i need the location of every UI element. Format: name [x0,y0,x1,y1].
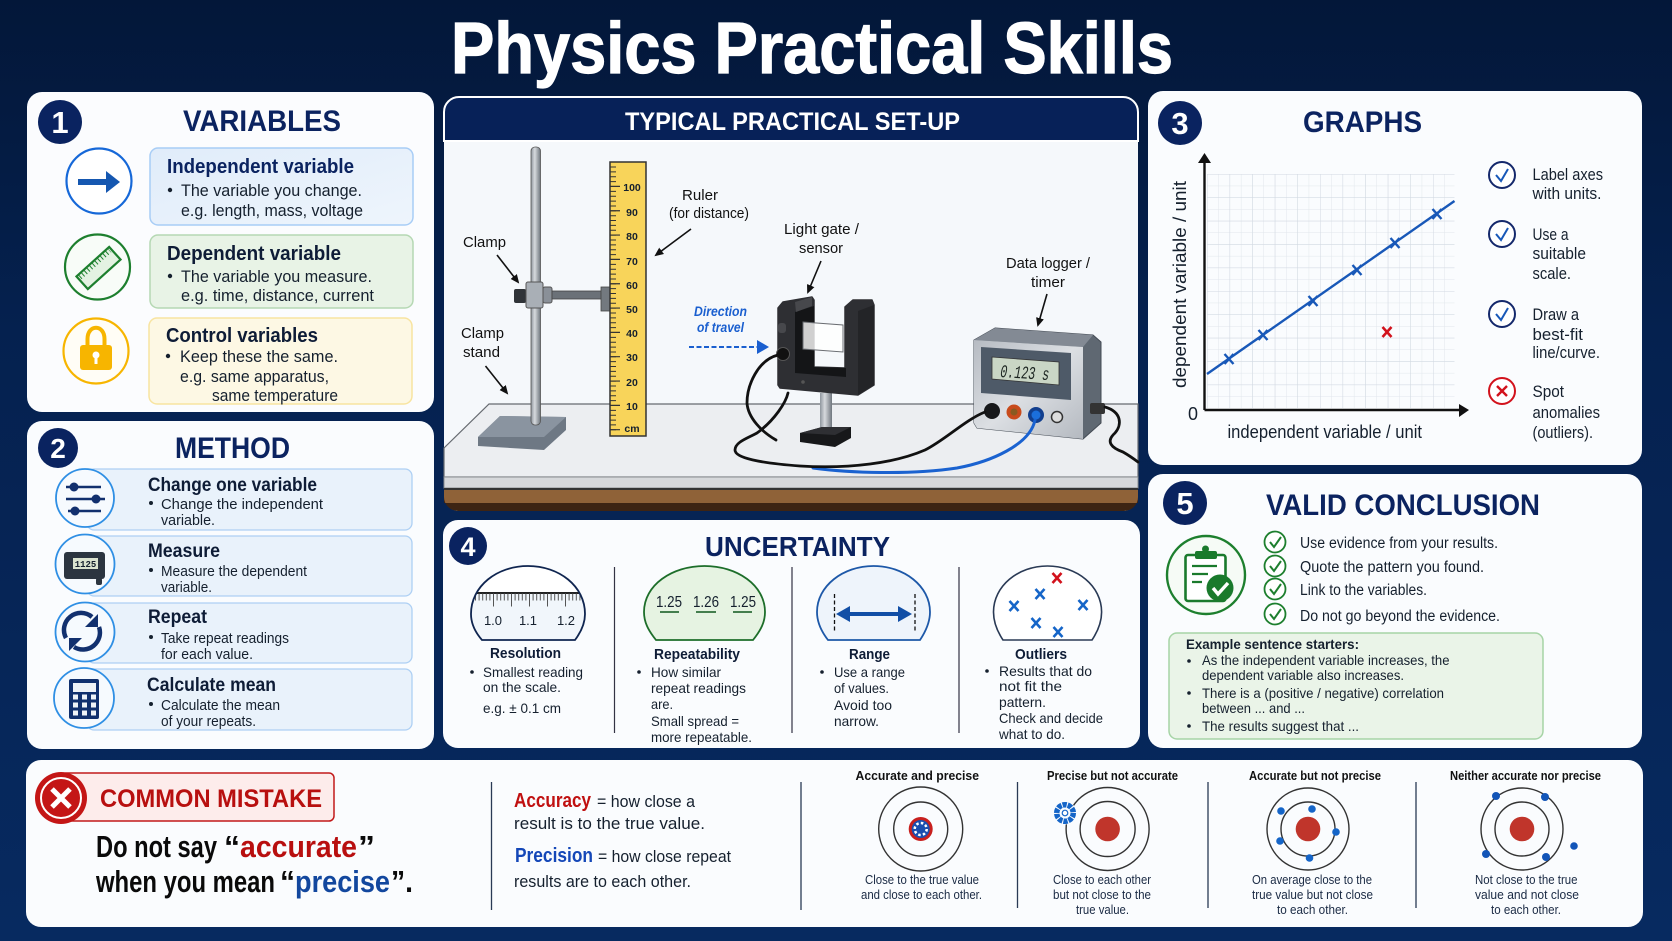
icon: resolution scale dome [470,566,586,640]
independent variable box: The variable you change. [181,181,362,200]
badge 1 [38,100,82,144]
panel: valid conclusion [1148,474,1642,748]
icon: arrow [66,148,132,214]
icon: ruler [65,234,130,300]
target: precise but not accurate: but not close to the [1053,888,1151,902]
title: Physics Practical Skills [451,9,1173,89]
target: accurate but not precise [1249,768,1381,917]
label: clamp stand: stand [463,344,500,361]
text: repeatability: more repeatable. [651,729,752,745]
definitions: Precision [515,845,593,867]
checklist: best-fit line: Draw a [1532,306,1580,324]
text: range: Use a range [834,664,905,680]
checklist item: evidence [1264,532,1498,552]
text: repeatability: Repeatability [654,646,741,663]
icon: repeatability dome: 1.26 [693,594,719,611]
target: accurate but not precise: On average close to the [1252,873,1372,887]
heading: uncertainty: UNCERTAINTY [705,531,890,562]
warning sentence: “ [224,829,240,864]
badge 4: 4 [460,532,476,562]
checklist item: pattern: Quote the pattern you found. [1300,559,1484,576]
badge 3: 3 [1171,106,1189,141]
control variables box [149,318,412,405]
badge 2 [38,428,78,468]
clamp stand [478,147,566,450]
label: ruler: (for distance) [669,205,749,222]
label: data logger [1006,255,1091,325]
direction of travel arrow: Direction [694,303,747,319]
checklist item: evidence: Use evidence from your results. [1300,535,1498,552]
text: outliers: Results that do [999,663,1092,679]
direction of travel arrow [689,303,769,354]
line graph [1170,153,1469,442]
text: range [820,646,905,729]
checklist: label axes: Label axes [1532,166,1603,184]
warning sentence: ” [358,829,375,864]
target: accurate but not precise: Accurate but not precise [1249,768,1381,783]
checklist: label axes: with units. [1532,185,1602,203]
target: accurate but not precise: true value but not close [1252,888,1373,902]
example sentence starters box: between ... and ... [1202,700,1305,716]
step: change one variable [87,469,412,530]
text: resolution: e.g. ± 0.1 cm [483,700,561,716]
warning sentence [95,829,413,899]
definitions: result is to the true value. [514,814,705,833]
label: light gate: sensor [799,240,843,257]
clamp [514,282,610,311]
line graph: independent variable / unit [1228,422,1422,442]
text: range: Range [849,646,890,663]
checklist: best-fit line: line/curve. [1532,344,1600,362]
heading: graphs: GRAPHS [1303,106,1422,139]
checklist item: variables [1264,578,1427,600]
text: outliers [985,646,1103,742]
target: neither accurate nor precise: Not close to the true [1475,873,1578,887]
step: calculate mean [87,669,412,730]
target: precise but not accurate: true value. [1076,903,1129,917]
panel: common mistake [26,760,1643,927]
text: outliers: what to do. [998,726,1065,742]
label: light gate: Light gate / [784,221,860,238]
icon: calculator [54,668,114,728]
definitions: = how close repeat [598,847,731,866]
checklist: best-fit line [1489,301,1600,362]
ruler: 10 [626,401,638,413]
common mistake banner: COMMON MISTAKE [100,785,322,813]
icon: lock [64,318,128,384]
control variables box: Keep these the same. [180,347,338,366]
ruler: 50 [626,304,638,316]
label: clamp [463,234,518,282]
text: repeatability: are. [651,696,673,712]
text: outliers: not fit the [999,678,1062,694]
text: resolution: on the scale. [483,679,561,695]
target: neither accurate nor precise: Neither accurate nor precise [1450,768,1601,783]
text: range: Avoid too [834,697,892,713]
warning sentence: accurate [240,829,357,864]
heading: variables: VARIABLES [183,105,341,138]
target: accurate and precise: Close to the true value [865,873,979,887]
text: resolution: Resolution [490,645,561,662]
text: outliers: Check and decide [999,710,1103,726]
panel: uncertainty [443,520,1140,748]
label: clamp: Clamp [463,234,506,251]
icon: resolution scale dome: 1.1 [519,613,537,628]
text: repeatability [637,646,752,745]
text: range: narrow. [834,713,879,729]
target: neither accurate nor precise [1450,768,1601,917]
line graph: 0 [1188,404,1198,424]
badge 4 [449,527,487,565]
heading: valid conclusion: VALID CONCLUSION [1266,489,1540,522]
icon: meter: 1125 [75,560,96,570]
checklist: anomalies: (outliers). [1532,424,1593,442]
text: outliers: Outliers [1015,646,1067,663]
header bar [444,97,1138,141]
target: precise but not accurate: Precise but not accurate [1047,768,1178,783]
label: clamp stand [461,325,507,393]
definitions: results are to each other. [514,872,691,891]
checklist item: pattern [1264,556,1484,576]
line graph: dependent variable / unit [1170,181,1190,388]
badge 2: 2 [50,433,66,464]
icon: sliders [56,469,114,527]
step: measure: Measure the dependent [161,563,308,580]
icon: repeatability dome: 1.25 [656,594,682,611]
icon: clipboard [1167,536,1245,614]
checklist: best-fit line: best-fit [1532,326,1583,344]
icon: range dome [817,566,930,640]
definitions [514,790,731,891]
independent variable box [150,148,413,225]
icon: outliers dome [994,566,1102,640]
example sentence starters box: The results suggest that ... [1202,718,1359,734]
example sentence starters box [1169,633,1543,739]
checklist: suitable scale: Use a [1532,226,1569,244]
icon: repeatability dome: 1.25 [730,594,756,611]
step: measure: variable. [161,579,212,596]
checklist: suitable scale: suitable [1532,245,1586,263]
step: repeat [87,603,412,663]
ruler: cm [624,423,640,435]
step: measure: Measure [148,540,220,562]
ruler: 30 [626,352,638,364]
checklist: suitable scale [1489,221,1586,283]
text: resolution [470,645,583,716]
ruler: 90 [626,207,638,219]
step: calculate mean: Calculate mean [147,674,276,696]
step: repeat: for each value. [161,646,253,663]
icon: repeatability dome [644,566,765,640]
icon: resolution scale dome: 1.0 [484,613,502,628]
checklist: suitable scale: scale. [1532,265,1571,283]
independent variable box: Independent variable [167,156,354,178]
label: ruler [656,187,749,255]
ruler [610,162,646,436]
label: data logger: timer [1031,274,1065,291]
target: precise but not accurate [1047,768,1178,917]
definitions: Accuracy [514,790,592,812]
ruler: 60 [626,280,638,292]
example sentence starters box: Example sentence starters: [1186,636,1359,652]
checklist item: variables: Link to the variables. [1300,582,1427,599]
warning sentence: when you mean [95,864,275,899]
light gate [776,297,874,447]
target: accurate and precise: Accurate and precise [856,768,979,783]
common mistake banner [35,772,334,824]
checklist item: beyond evidence [1264,604,1500,625]
warning sentence: “ [280,864,295,899]
panel: variables [27,92,434,412]
control variables box: e.g. same apparatus, [180,367,329,386]
example sentence starters box: As the independent variable increases, the [1202,652,1450,668]
label: ruler: Ruler [682,187,718,204]
step: change one variable: variable. [161,512,215,529]
badge 1: 1 [51,105,69,140]
control variables box: Control variables [166,325,318,347]
warning sentence: ”. [391,864,413,899]
step: repeat: Take repeat readings [161,630,289,647]
ruler: 70 [626,256,638,268]
target: accurate but not precise: to each other. [1277,903,1348,917]
definitions: = how close a [597,792,695,811]
icon: meter [56,534,114,594]
data logger: 0.123 s [1000,363,1050,386]
control variables box: same temperature [212,386,338,405]
target: precise but not accurate: Close to each other [1053,873,1151,887]
dependent variable box [150,235,413,308]
text: repeatability: repeat readings [651,680,746,696]
target: neither accurate nor precise: to each other. [1491,903,1561,917]
text: repeatability: How similar [651,664,721,680]
data logger [974,328,1105,439]
header bar: TYPICAL PRACTICAL SET-UP [625,108,960,136]
ruler: 40 [626,328,638,340]
target: neither accurate nor precise: value and not close [1475,888,1579,902]
checklist: anomalies: anomalies [1532,404,1600,422]
ruler: 80 [626,231,638,243]
text: resolution: Smallest reading [483,664,583,680]
icon: resolution scale dome: 1.2 [557,613,575,628]
label: data logger: Data logger / [1006,255,1091,272]
label: clamp stand: Clamp [461,325,504,342]
dependent variable box: e.g. time, distance, current [181,286,374,305]
badge 5 [1163,481,1207,525]
ruler: 20 [626,377,638,389]
step: change one variable: Change one variable [148,474,317,496]
checklist: label axes [1489,162,1603,203]
text: repeatability: Small spread = [651,713,739,729]
checklist item: beyond evidence: Do not go beyond the evidence. [1300,608,1500,625]
warning sentence: Do not say [96,829,218,864]
text: outliers: pattern. [999,694,1046,710]
example sentence starters box: There is a (positive / negative) correlation [1202,685,1444,701]
icon: repeat arrows [56,602,114,662]
badge 5: 5 [1176,486,1194,521]
ruler: 100 [623,182,641,194]
step: measure [87,536,412,596]
bench [444,404,1138,511]
badge 3 [1158,101,1202,145]
step: change one variable: Change the independent [161,496,324,513]
panel: typical practical set-up [444,97,1138,511]
text: range: of values. [834,680,889,696]
checklist: anomalies: Spot [1532,383,1564,401]
independent variable box: e.g. length, mass, voltage [181,201,363,220]
dependent variable box: Dependent variable [167,243,341,265]
panel: method [27,421,434,749]
target: accurate and precise [856,768,982,902]
example sentence starters box: dependent variable also increases. [1202,667,1404,683]
step: calculate mean: of your repeats. [161,713,256,730]
checklist: anomalies [1489,378,1600,442]
step: repeat: Repeat [148,606,207,628]
panel: graphs [1148,91,1642,465]
warning sentence: precise [295,864,390,899]
cables [735,355,1138,473]
target: accurate and precise: and close to each other. [861,888,982,902]
heading: method: METHOD [175,432,290,465]
label: light gate [784,221,860,292]
direction of travel arrow: of travel [697,319,745,335]
step: calculate mean: Calculate the mean [161,697,280,714]
dependent variable box: The variable you measure. [181,267,372,286]
